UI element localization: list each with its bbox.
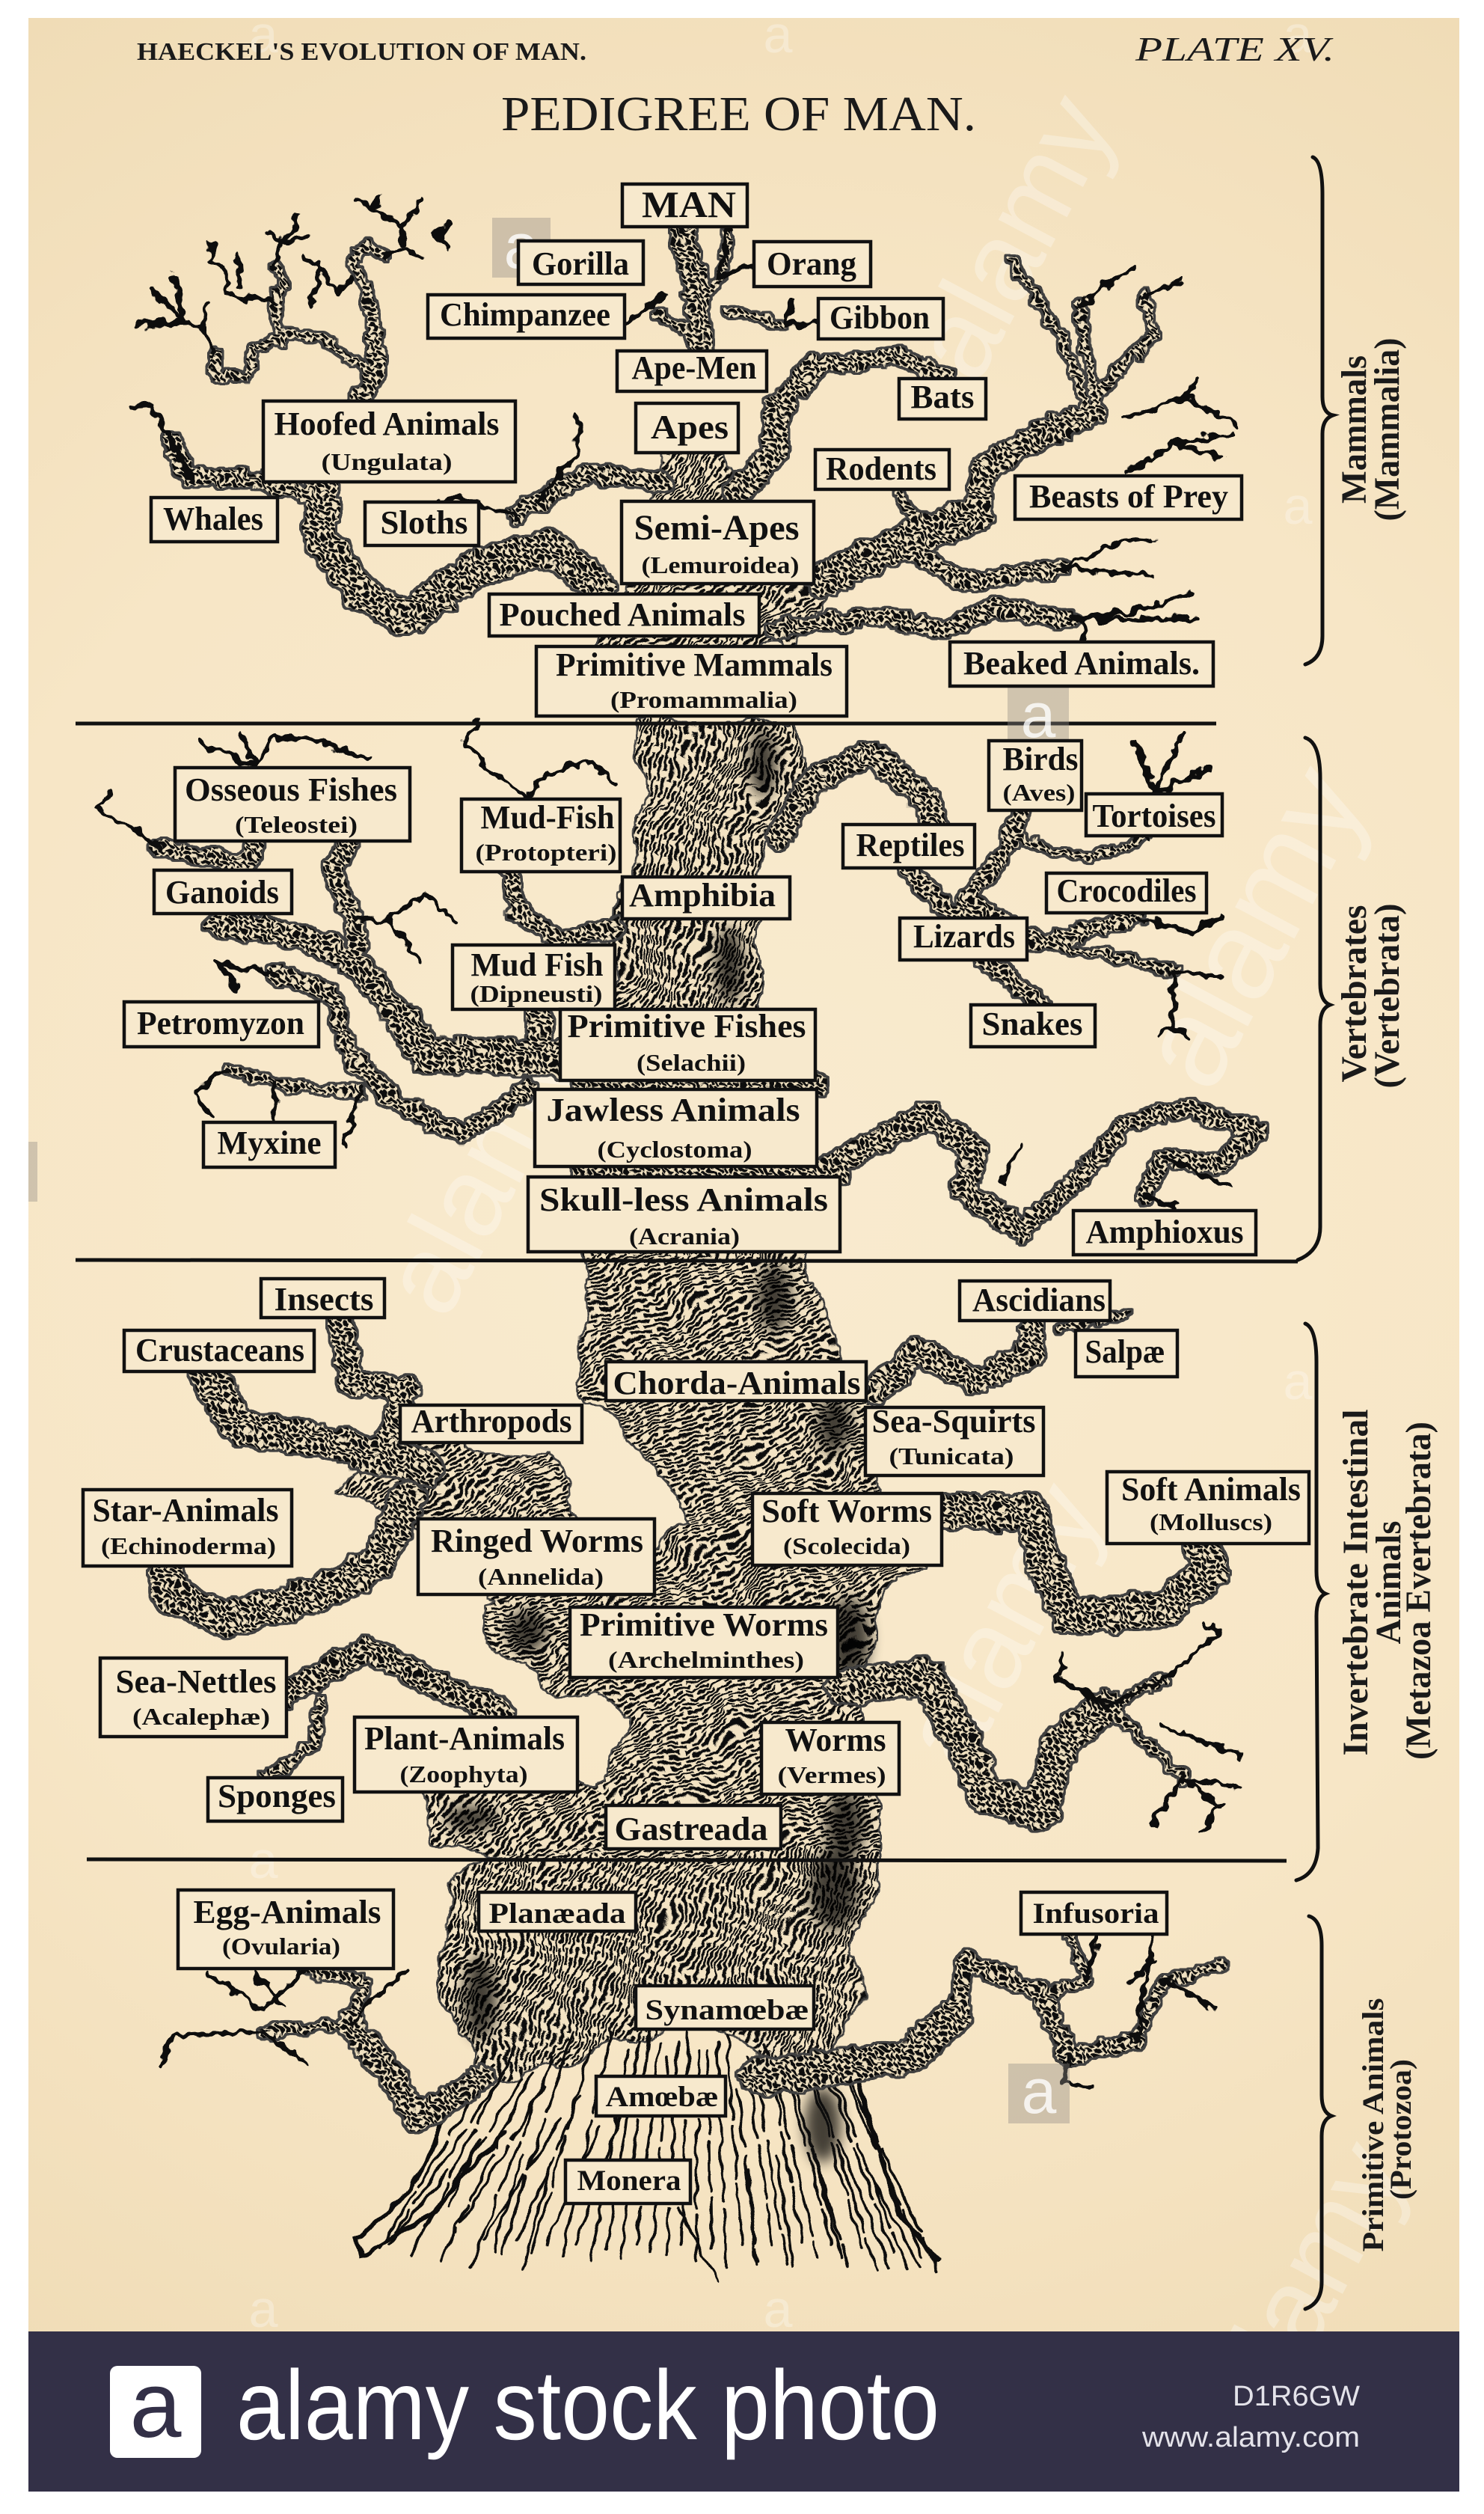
label: Planaeada	[479, 1892, 636, 1931]
label: Man: MAN	[642, 183, 736, 225]
label: Petromyzon: Petromyzon	[137, 1005, 304, 1042]
label: Apes	[636, 403, 738, 453]
label: Snakes	[971, 1005, 1095, 1047]
label: Birds: (Aves)	[1002, 779, 1076, 806]
label: Soft Animals: (Molluscs)	[1150, 1508, 1272, 1535]
title: PEDIGREE OF MAN.	[501, 87, 976, 141]
label: Ringed Worms: (Annelida)	[478, 1563, 604, 1590]
label: Amphibia: Amphibia	[629, 877, 776, 914]
label: Osseous Fishes: Osseous Fishes	[185, 771, 397, 808]
watermarks: a	[1284, 5, 1313, 64]
label: Primitive Mammals	[536, 646, 847, 716]
label: Myxine	[203, 1122, 335, 1167]
label: Primitive Worms: (Archelminthes)	[608, 1646, 804, 1673]
label: Monera: Monera	[577, 2165, 681, 2197]
twigs	[95, 195, 1242, 2088]
grey watermark tiles: a	[504, 211, 539, 281]
label: Chimpanzee: Chimpanzee	[440, 296, 610, 333]
watermarks: alamy	[356, 1010, 607, 1333]
label: Soft Worms	[752, 1493, 942, 1565]
label: Arthropods: Arthropods	[411, 1403, 571, 1440]
watermarks: alamy	[1179, 2121, 1430, 2444]
labels: vertebrates	[124, 741, 1256, 1255]
watermarks: a	[1284, 477, 1313, 535]
bracket: invertebrate animals: (Metazoa Evertebrata)	[1399, 1422, 1438, 1760]
trunk shadows	[446, 730, 870, 2162]
watermarks: a	[764, 2280, 793, 2338]
label: Sea-Squirts: (Tunicata)	[889, 1443, 1014, 1469]
label: Synamoebae	[636, 1986, 814, 2029]
label: Lizards: Lizards	[913, 918, 1015, 955]
grey watermark tiles	[28, 211, 1070, 2126]
label: Mud-Fish: (Protopteri)	[476, 839, 616, 866]
branches: primitive animals	[265, 1935, 1221, 2120]
branches: invertebrates	[165, 1315, 1211, 1813]
label: Birds	[989, 741, 1082, 810]
grey watermark tiles: a	[1022, 2056, 1057, 2126]
image id: D1R6GW	[1233, 2381, 1360, 2412]
label: Sea-Nettles: (Acalephæ)	[132, 1703, 270, 1730]
label: Gorilla: Gorilla	[532, 245, 629, 282]
label: Ringed Worms: Ringed Worms	[431, 1523, 643, 1559]
label: Soft Animals	[1107, 1471, 1309, 1544]
label: Hoofed Animals: (Ungulata)	[322, 448, 452, 475]
tree: trunk and branches	[95, 195, 1258, 2282]
icon: alamy logo	[110, 2354, 201, 2458]
label: Semi-Apes: (Lemuroidea)	[642, 551, 799, 578]
label: Rodents: Rodents	[826, 450, 936, 487]
label: Ringed Worms	[418, 1519, 654, 1594]
label: Sea-Nettles	[100, 1658, 286, 1737]
label: Infusoria: Infusoria	[1032, 1897, 1159, 1930]
label: Whales: Whales	[163, 501, 263, 537]
label: Gorilla	[518, 241, 643, 284]
footer banner	[28, 2331, 1459, 2492]
header left: HAECKEL'S EVOLUTION OF MAN.	[137, 38, 586, 66]
label: Soft Animals: Soft Animals	[1121, 1471, 1301, 1508]
label: Soft Worms: (Scolecida)	[783, 1532, 910, 1559]
label: Osseous Fishes: (Teleostei)	[235, 811, 358, 838]
label: Egg-Animals	[178, 1890, 393, 1969]
watermarks	[249, 5, 1430, 2444]
label: Sea-Squirts	[865, 1403, 1043, 1475]
label: Primitive Mammals: (Promammalia)	[610, 686, 797, 713]
watermarks: a	[1284, 1352, 1313, 1410]
label: Worms: (Vermes)	[778, 1761, 886, 1788]
label: Sloths: Sloths	[380, 504, 468, 541]
label: Skull-less Animals: (Acrania)	[629, 1223, 740, 1250]
label: Mud Fish: Mud Fish	[471, 946, 603, 983]
label: Egg-Animals: (Ovularia)	[222, 1933, 340, 1960]
label: Primitive Fishes: Primitive Fishes	[567, 1008, 806, 1045]
label: Beaked Animals: Beaked Animals.	[963, 645, 1200, 682]
label: Salpae	[1076, 1330, 1177, 1377]
label: Whales	[151, 498, 278, 542]
label: Crustaceans: Crustaceans	[135, 1332, 304, 1368]
bracket: invertebrate animals: Invertebrate Intestinal	[1336, 1410, 1376, 1755]
label: Snakes: Snakes	[981, 1006, 1083, 1042]
label: Synamoebae: Synamœbæ	[645, 1994, 809, 2026]
watermarks: alamy	[876, 1463, 1127, 1786]
label: Semi-Apes: Semi-Apes	[634, 508, 799, 548]
label: Primitive Fishes: (Selachii)	[637, 1049, 746, 1076]
branches: vertebrates	[161, 753, 1258, 1230]
label: Apes: Apes	[651, 408, 729, 446]
label: Amoebae: Amœbæ	[606, 2081, 718, 2113]
divider lines	[76, 724, 1298, 1861]
label: Infusoria	[1021, 1892, 1167, 1934]
watermarks: a	[249, 2280, 278, 2338]
label: Sea-Nettles: Sea-Nettles	[115, 1663, 277, 1700]
label: Planaeada: Planæada	[489, 1897, 625, 1930]
label: Gibbon: Gibbon	[830, 299, 930, 336]
bracket: mammals	[1305, 157, 1407, 664]
label: Mud-Fish	[462, 799, 620, 872]
labels: primitive animals	[178, 1890, 1167, 2203]
label: Jawless Animals: (Cyclostoma)	[597, 1136, 752, 1163]
label: Crocodiles: Crocodiles	[1056, 872, 1197, 909]
label: Soft Worms: Soft Worms	[761, 1493, 932, 1529]
bracket: invertebrate animals	[1296, 1324, 1438, 1880]
label: Star-Animals: Star-Animals	[93, 1492, 278, 1529]
label: Ganoids: Ganoids	[165, 874, 279, 911]
label: Worms: Worms	[785, 1722, 886, 1758]
website: www.alamy.com	[1141, 2422, 1360, 2453]
label: Orang	[754, 242, 871, 287]
bracket: mammals: Mammals	[1334, 355, 1374, 504]
label: Osseous Fishes	[175, 768, 410, 841]
label: Plant-Animals: Plant-Animals	[364, 1720, 565, 1757]
label: Insects: Insects	[274, 1281, 374, 1318]
label: Mud-Fish: Mud-Fish	[480, 799, 615, 836]
watermarks: alamy	[1109, 743, 1394, 1110]
label: Hoofed Animals: Hoofed Animals	[274, 406, 500, 442]
trunk	[326, 449, 922, 2073]
label: Skull-less Animals: Skull-less Animals	[539, 1181, 828, 1218]
branches: mammals	[171, 232, 1154, 630]
label: Hoofed Animals	[263, 401, 515, 482]
bracket: primitive animals	[1305, 1916, 1417, 2309]
label: Beasts of Prey: Beasts of Prey	[1029, 478, 1228, 515]
label: Monera	[565, 2160, 690, 2203]
bracket: vertebrates: (Vertebrata)	[1367, 904, 1407, 1088]
label: Sponges: Sponges	[218, 1778, 336, 1814]
header right: plate number: PLATE XV.	[1135, 30, 1334, 68]
label: Sea-Squirts: Sea-Squirts	[872, 1403, 1035, 1440]
label: Salpae: Salpæ	[1085, 1333, 1165, 1370]
roots	[357, 2031, 938, 2282]
label: Ascidians: Ascidians	[972, 1282, 1106, 1318]
watermarks: a	[764, 5, 793, 64]
label: Birds: Birds	[1002, 741, 1079, 777]
label: Chorda-Animals: Chorda-Animals	[613, 1365, 860, 1401]
label: Plant-Animals	[355, 1717, 577, 1792]
label: Amphioxus: Amphioxus	[1086, 1214, 1243, 1250]
bracket: vertebrates: Vertebrates	[1334, 905, 1374, 1082]
label: Reptiles: Reptiles	[856, 827, 965, 863]
label: Amoebae	[596, 2076, 726, 2116]
label: Primitive Fishes	[560, 1008, 815, 1080]
label: Skull-less Animals	[528, 1177, 840, 1252]
label: Primitive Mammals: Primitive Mammals	[556, 646, 833, 683]
bracket: primitive animals: Primitive Animals	[1356, 1998, 1390, 2252]
labels: mammals	[151, 183, 1242, 716]
label: Myxine: Myxine	[217, 1125, 322, 1161]
bracket: primitive animals: (Protozoa)	[1384, 2059, 1417, 2200]
label: Plant-Animals: (Zoophyta)	[399, 1761, 528, 1787]
label: Worms	[761, 1722, 899, 1794]
label: Primitive Worms	[570, 1606, 838, 1677]
label: Jawless Animals: Jawless Animals	[546, 1092, 800, 1128]
label: Pouched Animals: Pouched Animals	[500, 596, 745, 633]
label: Bats	[899, 379, 986, 419]
label: Star-Animals: (Echinoderma)	[101, 1532, 276, 1559]
label: Gastreada: Gastreada	[615, 1811, 767, 1847]
labels: invertebrates	[83, 1279, 1309, 1849]
label: Mud Fish: (Dipneusti)	[470, 980, 603, 1007]
icon: alamy logo: a	[130, 2354, 182, 2457]
label: Orang: Orang	[767, 245, 856, 282]
label: Star-Animals	[83, 1490, 292, 1566]
brand text: alamy stock photo	[236, 2350, 939, 2460]
label: Jawless Animals	[535, 1089, 817, 1166]
watermarks: a	[249, 1831, 278, 1889]
bracket: vertebrates	[1298, 738, 1407, 1260]
label: Primitive Worms: Primitive Worms	[580, 1606, 828, 1643]
label: Bats: Bats	[911, 379, 974, 415]
label: Tortoises: Tortoises	[1092, 798, 1216, 834]
label: Sloths	[365, 502, 479, 545]
grey watermark tiles: a	[1021, 680, 1056, 750]
label: Semi-Apes	[622, 501, 814, 584]
watermarks: a	[249, 5, 278, 64]
label: Mud Fish	[453, 945, 615, 1009]
bracket: mammals: (Mammalia)	[1367, 338, 1407, 521]
watermarks: alamy	[887, 75, 1138, 398]
bracket: invertebrate animals: Animals	[1369, 1520, 1408, 1645]
label: Man	[622, 183, 747, 227]
label: Ape-Men: Ape-Men	[631, 349, 757, 386]
label: Egg-Animals: Egg-Animals	[193, 1894, 381, 1930]
